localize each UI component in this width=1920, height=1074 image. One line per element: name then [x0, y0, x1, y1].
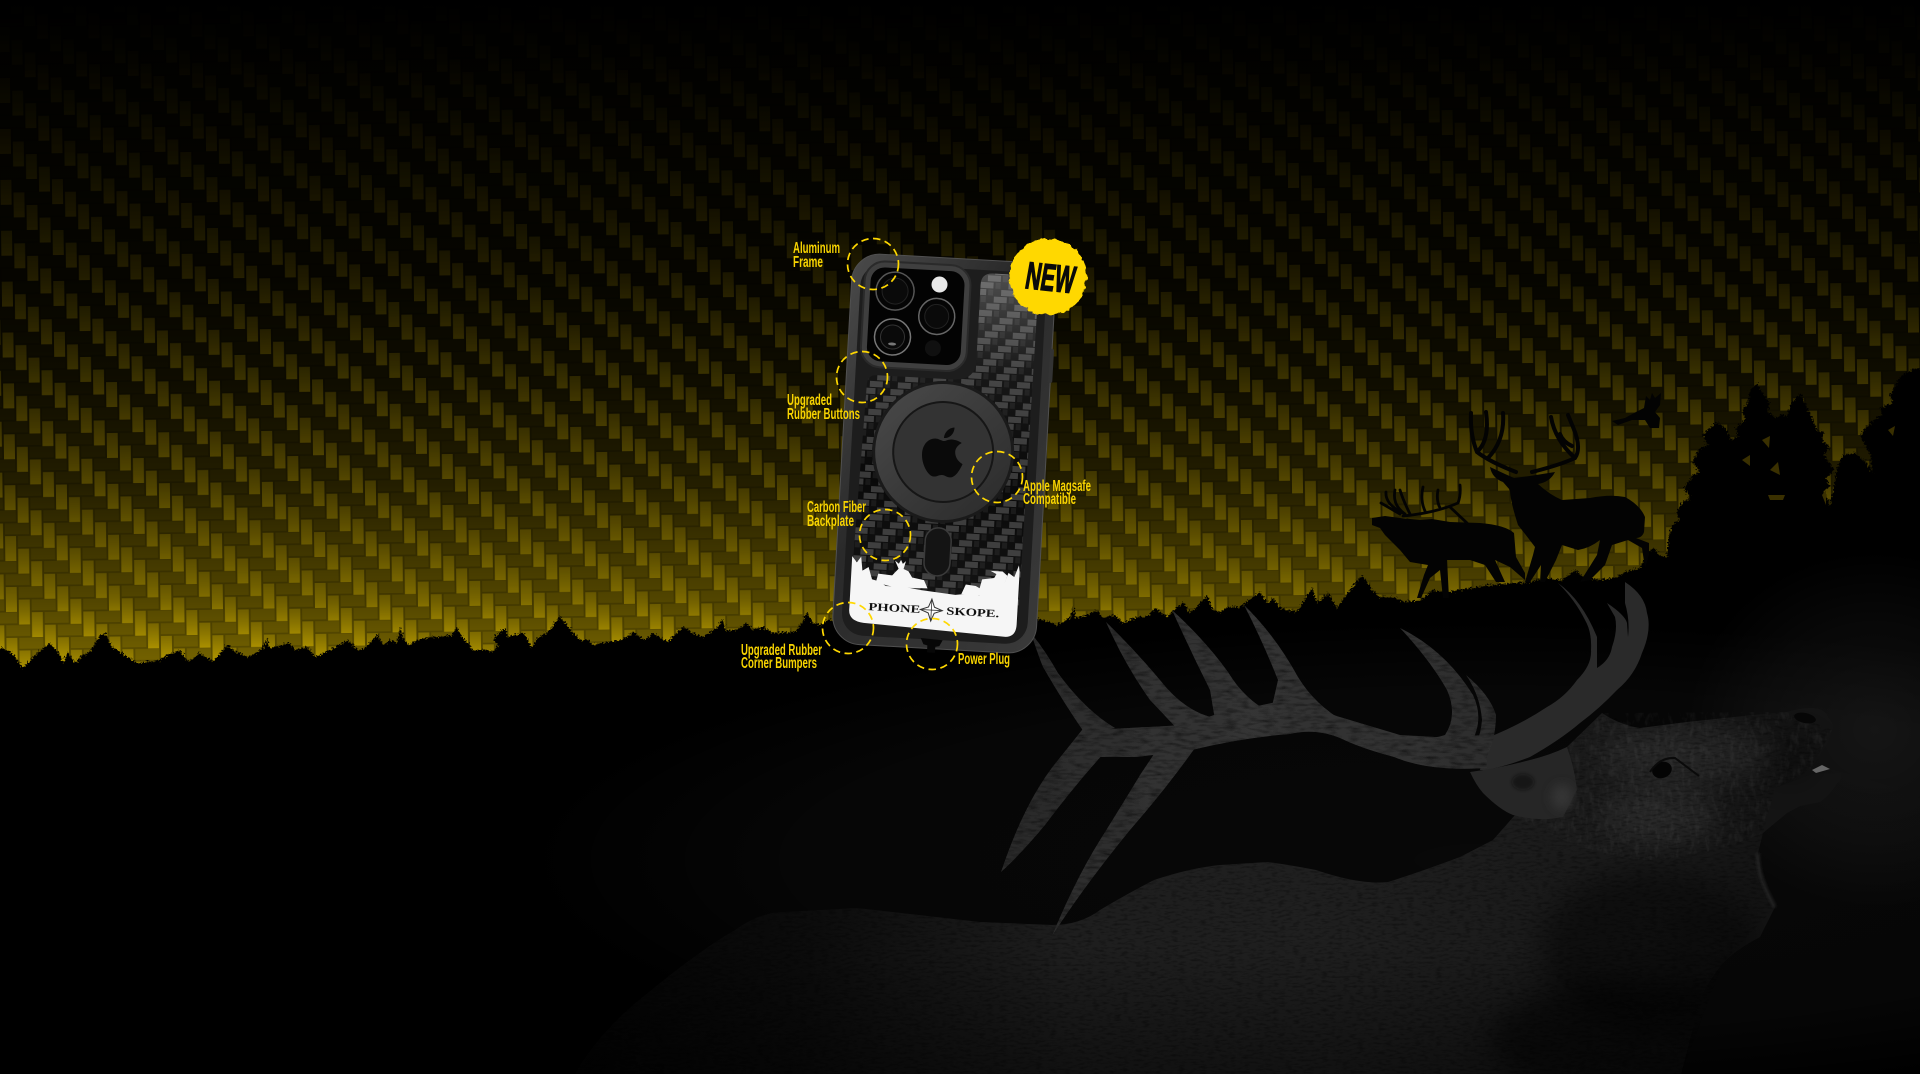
label: upgraded rubber corner bumpers: Corner Bumpers — [741, 655, 817, 672]
bull elk photo — [756, 582, 1830, 1074]
far antler — [1480, 582, 1649, 770]
label: carbon fiber backplate: Carbon Fiber — [807, 499, 866, 516]
camera island — [860, 260, 972, 372]
label: upgraded rubber buttons: Upgraded — [787, 392, 832, 409]
label: upgraded rubber buttons — [787, 392, 860, 423]
flash — [931, 276, 948, 293]
teeth — [1812, 765, 1830, 773]
elk body — [575, 708, 1841, 1074]
gaps between right-hand trees — [1742, 426, 1895, 505]
brand logo: SKOPE. — [946, 605, 1000, 620]
apple logo — [921, 426, 965, 478]
carbon fiber backplate — [849, 267, 1039, 625]
compass star — [920, 598, 943, 622]
treeline and hill silhouette — [0, 368, 1920, 1074]
label: apple magsafe compatible: Compatible — [1023, 491, 1076, 508]
brand logo: PHONE — [868, 601, 921, 616]
phone case — [831, 253, 1059, 659]
label: aluminum frame: Frame — [793, 254, 823, 271]
brand logo — [868, 596, 1000, 625]
near antler — [1001, 605, 1496, 936]
lens 3 — [874, 318, 911, 356]
new badge — [1010, 238, 1086, 316]
throat highlight — [1758, 853, 1775, 907]
right side button — [1048, 349, 1054, 383]
label: apple magsafe compatible — [1023, 478, 1091, 508]
lens 1 — [875, 271, 915, 311]
white elk and moose silhouettes — [876, 558, 929, 589]
label: aluminum frame: Aluminum — [793, 240, 840, 257]
charging port flap — [920, 638, 943, 653]
forest glow behind elk — [520, 620, 1920, 1074]
magsafe ring — [868, 377, 1018, 527]
nostril — [1793, 711, 1817, 725]
silhouette: mule deer buck — [1471, 412, 1649, 582]
white logo plate — [848, 556, 1020, 637]
lidar — [925, 340, 941, 357]
label: carbon fiber backplate: Backplate — [807, 513, 854, 530]
pill button — [923, 527, 952, 577]
label: upgraded rubber buttons: Rubber Buttons — [787, 406, 860, 423]
shading on head and neck — [900, 732, 1756, 1074]
head and upper neck fur highlights — [1515, 712, 1832, 860]
label: aluminum frame — [793, 240, 840, 271]
callout circles — [822, 238, 1022, 670]
inner bumper — [841, 263, 1047, 645]
label: upgraded rubber corner bumpers: Upgraded Rubber — [741, 642, 822, 659]
ear — [1470, 747, 1577, 819]
label: upgraded rubber corner bumpers — [741, 642, 822, 672]
case body — [831, 253, 1057, 654]
background: carbon fiber weave with yellow glow — [0, 74, 1920, 670]
label: carbon fiber backplate — [807, 499, 866, 530]
eye — [1650, 758, 1699, 781]
label: power plug: Power Plug — [958, 651, 1010, 668]
label: apple magsafe compatible: Apple Magsafe — [1023, 478, 1091, 495]
silhouette: bird in flight — [1612, 393, 1661, 428]
misty haze right side — [1685, 550, 1920, 910]
new badge: NEW — [1022, 255, 1079, 302]
lens 2 — [918, 297, 956, 335]
fur texture — [575, 712, 1832, 1074]
silhouette: elk bugling — [1372, 485, 1525, 598]
